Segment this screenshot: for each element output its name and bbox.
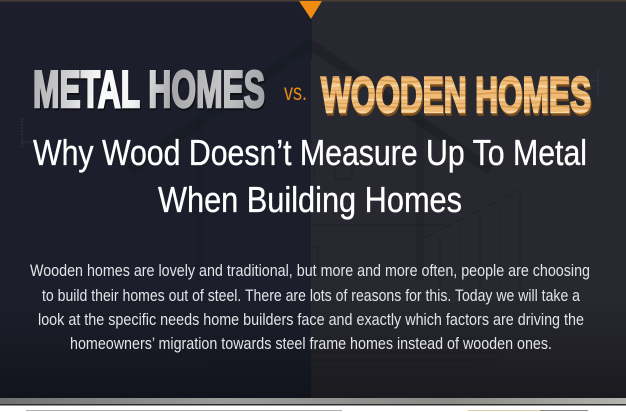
intro paragraph [30, 262, 590, 353]
vs. label: vs. [284, 79, 307, 105]
title: When Building Homes [158, 179, 462, 220]
footer strip [0, 406, 626, 412]
background: wood side [311, 0, 626, 398]
grey divider band [0, 398, 626, 404]
icon: orange down arrow [299, 1, 322, 19]
heading: metal homes [33, 61, 266, 121]
intro paragraph: homeowners’ migration towards steel frame homes instead of wooden ones. [70, 335, 552, 353]
heading: metal homes: METAL HOMES [33, 61, 265, 119]
background house blueprint [22, 18, 598, 368]
title [33, 132, 587, 220]
background: metal side [0, 0, 311, 398]
top strip [0, 0, 626, 2]
heading: metal homes: METAL HOMES [34, 63, 266, 121]
